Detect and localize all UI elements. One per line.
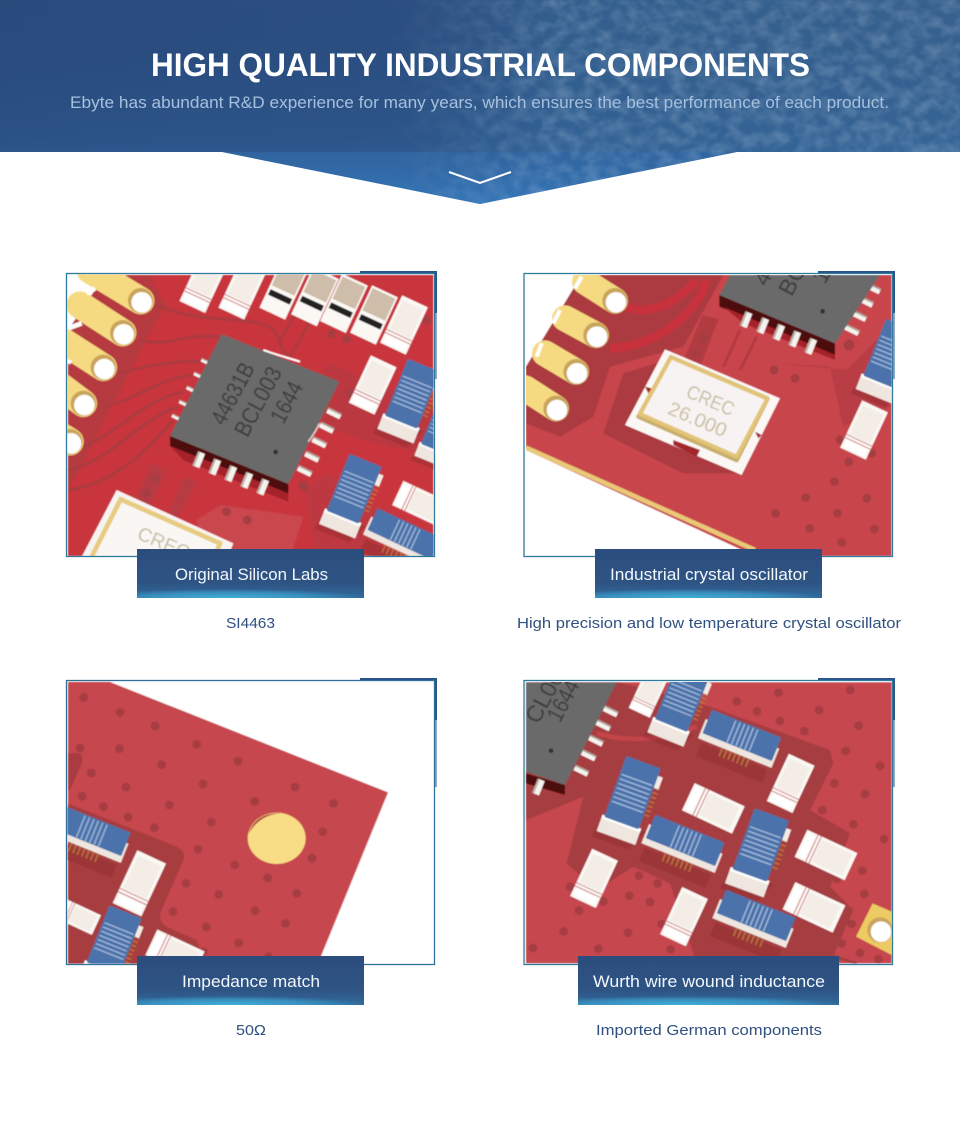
label: Impedance match: Impedance match [182,972,320,991]
label: Wurth wire wound inductance: Wurth wire wound inductance [593,972,825,991]
icon: chevron arrow [449,172,511,183]
inductor and resistor at the right edge [840,318,892,460]
inductors [314,357,476,581]
photo: inductors on PCB [520,660,893,964]
label: Impedance match [137,956,364,1005]
crystal oscillator [625,349,780,475]
label: Industrial crystal oscillator [595,549,822,598]
crystal corner [80,490,233,560]
chip [520,666,619,796]
gold pad [856,903,892,955]
description: German components: Imported German components [596,1022,822,1039]
label: Industrial crystal oscillator: Industrial crystal oscillator [610,565,808,584]
chip: 1644 [541,675,585,726]
resistors [570,669,857,946]
photo: SI4463 chip on PCB: CREC [134,524,193,564]
chip: BC [773,259,811,300]
title: HIGH QUALITY INDUSTRIAL COMPONENTS [151,47,810,83]
components [41,804,205,997]
photo: crystal oscillator on PCB [526,275,892,556]
chip: 1 [806,264,836,287]
panel: Original Silicon Labs [40,254,476,632]
description: crystal oscillator: High precision and low temperature crystal oscillator [517,615,901,632]
image frame [524,680,892,964]
chip [719,259,881,360]
corner accent [360,678,437,787]
subtitle: Ebyte has abundant R&D experience for many years, which ensures the best performance of each product. [70,93,889,112]
label: Original Silicon Labs [137,549,364,598]
top row of SMD components [179,254,428,415]
corner accent [818,678,895,787]
panel: Industrial crystal oscillator [517,259,925,632]
chip: CL00 [520,666,569,727]
description: 50 ohm: 50Ω [236,1022,266,1039]
photo: SI4463 chip on PCB: 44631B [205,358,260,429]
image frame [66,680,434,964]
corner accent [360,271,437,379]
image frame [524,274,892,556]
wire wound inductors [592,660,798,964]
crystal oscillator: CREC [683,382,737,421]
photo: SI4463 chip on PCB: BCL003 [229,362,287,441]
chip body [170,334,339,484]
chip: 4 [748,266,777,290]
panel: Impedance match [41,678,437,1039]
photo: SI4463 chip on PCB: 1644 [265,377,308,427]
photo: SI4463 chip on PCB [68,274,434,556]
crystal oscillator: 26.000 [665,399,730,442]
photo: antenna pad on PCB [68,682,388,964]
panel: Wurth wire wound inductance [520,660,895,1039]
image frame [66,274,434,556]
corner accent [818,271,895,379]
label: Original Silicon Labs: Original Silicon Labs [175,565,328,584]
label: Wurth wire wound inductance [578,956,839,1005]
chip pins [171,358,342,477]
header banner [0,0,960,204]
description: SI4463: SI4463 [226,615,275,632]
